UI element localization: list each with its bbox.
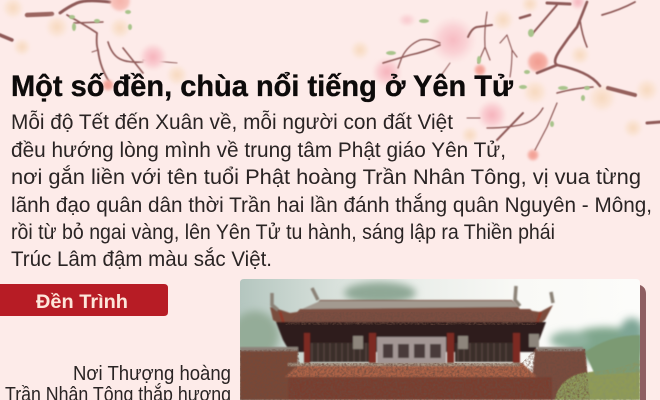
- photo: Đền Trình temple: [231, 279, 645, 400]
- caption text: [5, 362, 231, 400]
- small white panels: [353, 334, 539, 349]
- intro paragraph: [11, 109, 652, 271]
- blossom branch: top left: [0, 0, 189, 91]
- section label: Đền Trình: Đền Trình: [36, 291, 128, 313]
- title: Một số đền, chùa nổi tiếng ở Yên Tử: [11, 70, 513, 103]
- caption text: Nơi Thượng hoàng: [73, 362, 231, 385]
- side walls: [240, 349, 298, 400]
- intro paragraph: đều hướng lòng mình về trung tâm Phật giáo Yên Tử,: [11, 138, 506, 162]
- intro paragraph: Trúc Lâm đậm màu sắc Việt.: [11, 246, 272, 271]
- red columns: [304, 333, 310, 363]
- upper roof: [270, 300, 553, 327]
- intro paragraph: rồi từ bỏ ngai vàng, lên Yên Tử tu hành, sáng lập ra Thiền phái: [11, 220, 555, 244]
- lower roof and brick wall: [285, 363, 537, 377]
- photo shadow: [640, 285, 646, 400]
- dark wall under eave: [276, 322, 546, 352]
- blossom branch: top right: [349, 0, 660, 161]
- foliage: [554, 370, 640, 400]
- intro paragraph: nơi gắn liền với tên tuổi Phật hoàng Trần Nhân Tông, vị vua từng: [11, 164, 641, 189]
- intro paragraph: Mỗi độ Tết đến Xuân về, mỗi người con đất Việt: [11, 109, 453, 134]
- foliage texture: [555, 360, 640, 400]
- roof finials: [272, 286, 553, 310]
- calligraphy plaque: [377, 337, 446, 363]
- intro paragraph: lãnh đạo quân dân thời Trần hai lần đánh thắng quân Nguyên - Mông,: [11, 192, 652, 217]
- section label: Đền Trình: [0, 284, 168, 316]
- brick and roof texture: [240, 312, 590, 400]
